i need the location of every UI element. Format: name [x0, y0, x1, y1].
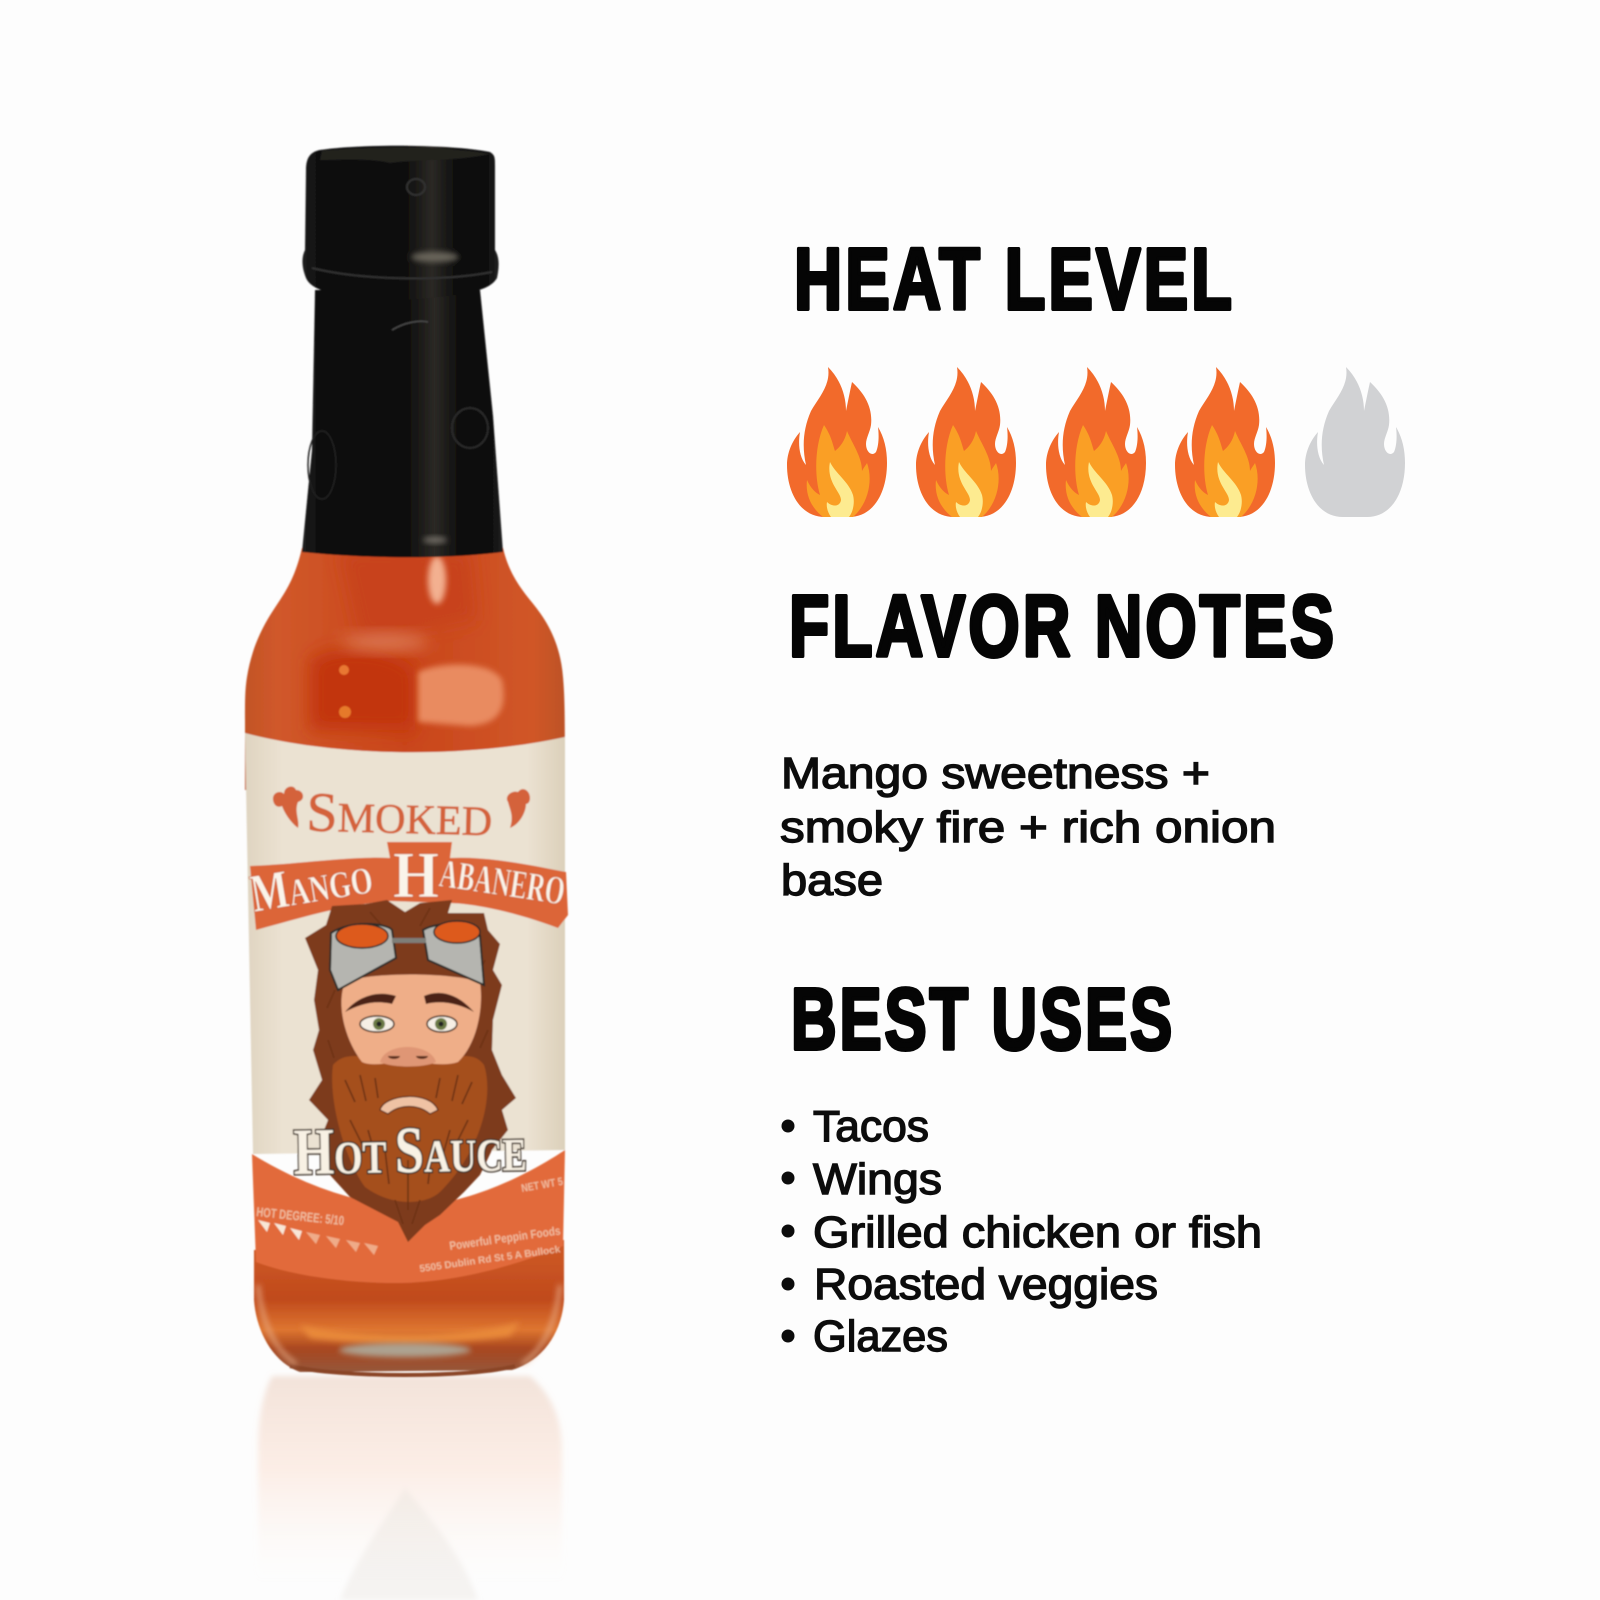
- label text: Hot Sauce: HOT SAUCE: [293, 1112, 527, 1189]
- list: best uses: Glazes: [813, 1312, 948, 1361]
- hair and beard: [305, 900, 516, 1242]
- label character: bearded man with goggles: [305, 900, 516, 1242]
- bottle label: [245, 733, 568, 1283]
- list: best uses: Wings: [813, 1155, 942, 1204]
- heading: best uses: BEST USES: [791, 971, 1175, 1068]
- list: best uses: Grilled chicken or fish: [813, 1208, 1262, 1257]
- bottle bottom glass and sauce: [254, 1240, 564, 1375]
- icon: flame 4: [1175, 367, 1275, 517]
- list: best uses: [782, 1102, 1262, 1361]
- label small print: Powerful Peppin Foods: [448, 1223, 562, 1253]
- product photo: hot sauce bottle: [245, 146, 568, 1375]
- icon: flame 2: [916, 367, 1016, 517]
- icon: flame 3: [1046, 367, 1146, 517]
- eyebrows and eyes: [345, 994, 396, 1012]
- label heading: Smoked: SMOKED: [306, 782, 493, 848]
- label orange band: [252, 1150, 565, 1283]
- text block: flavor description: [780, 749, 1276, 905]
- text block: flavor description: smoky fire + rich onion: [780, 803, 1276, 852]
- icon: flame 5 inactive: [1305, 367, 1405, 517]
- label small print: NET WT 5: [520, 1176, 564, 1195]
- heat rating: four of five flames: [787, 367, 1405, 517]
- label banner: Mango Habanero: H: [393, 839, 439, 912]
- bottle shoulder and sauce: [245, 548, 565, 790]
- goggles: [330, 924, 396, 990]
- heading: flavor notes: FLAVOR NOTES: [789, 578, 1337, 675]
- label banner: Mango Habanero: MANGO: [246, 845, 376, 924]
- label small print: 5505 Dublin Rd St 5 A Bullock: [419, 1244, 561, 1275]
- mouth: [380, 1096, 438, 1114]
- label banner: Mango Habanero: ABANERO: [437, 850, 568, 914]
- label heading: Smoked: [273, 782, 530, 848]
- label pepper rating row: [258, 1220, 378, 1255]
- bottle reflection: [258, 1376, 562, 1600]
- heading: heat level: HEAT LEVEL: [794, 231, 1235, 328]
- list: best uses: Tacos: [813, 1102, 929, 1151]
- black wax cap: [302, 146, 499, 300]
- label small print: [256, 1176, 564, 1275]
- black wax neck: [302, 290, 503, 557]
- text block: flavor description: Mango sweetness +: [781, 749, 1210, 798]
- text block: flavor description: base: [781, 856, 883, 905]
- icon: flame 1: [787, 367, 887, 517]
- label cream paper: [245, 733, 565, 1154]
- label banner: Mango Habanero: [246, 839, 568, 930]
- label small print: HOT DEGREE: 5/10: [256, 1204, 345, 1228]
- list: best uses: Roasted veggies: [814, 1260, 1158, 1309]
